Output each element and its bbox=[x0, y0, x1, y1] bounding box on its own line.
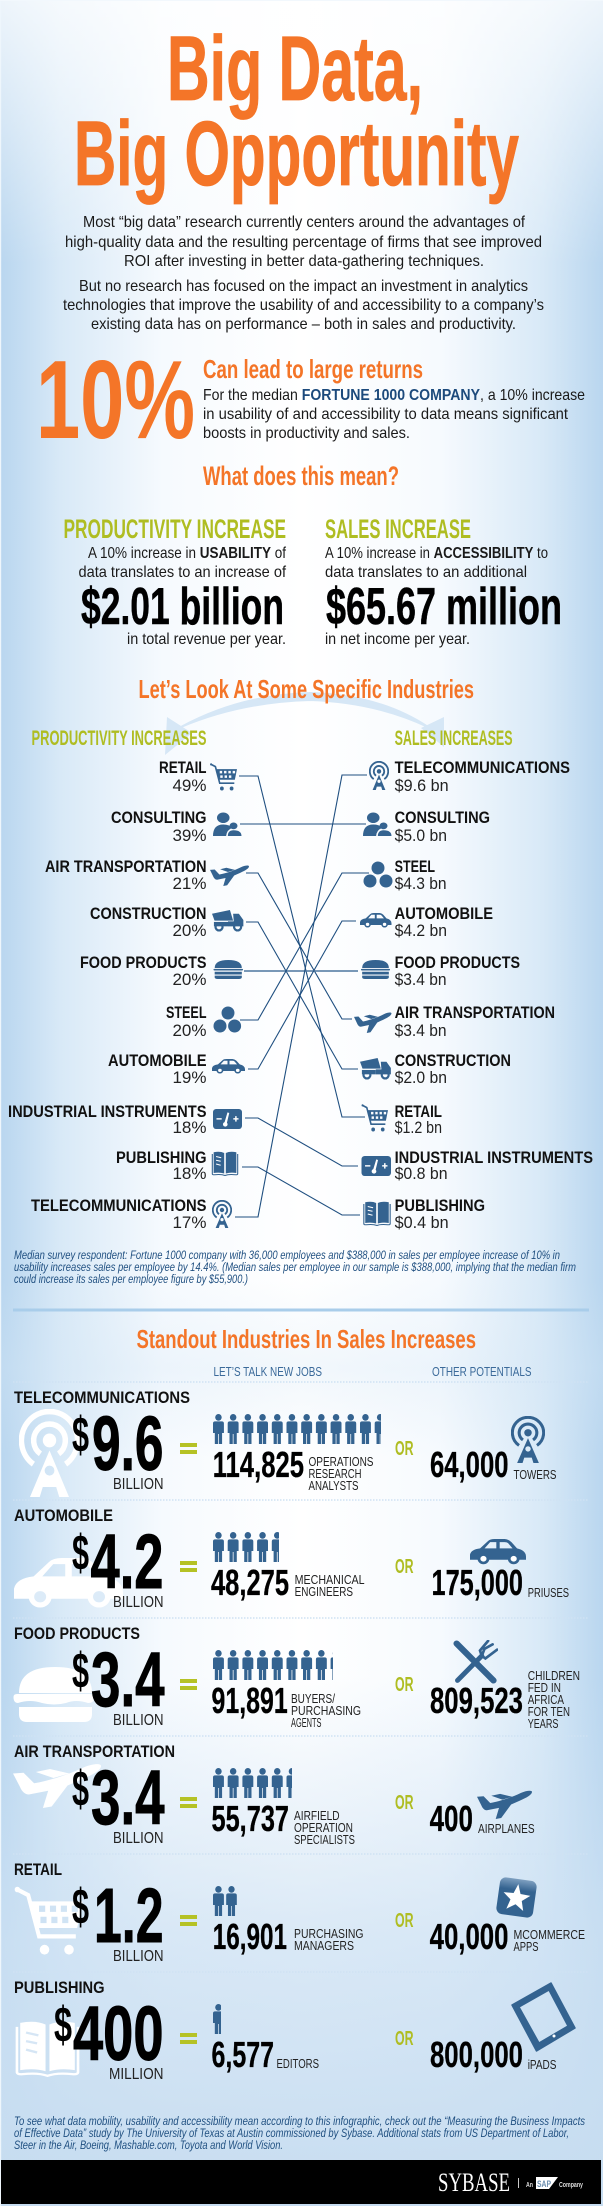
10 percent text: boosts in productivity and sales. bbox=[203, 425, 410, 442]
children fed figure: FOR TEN bbox=[528, 1704, 570, 1719]
jobs figure: EDITORS bbox=[276, 2056, 319, 2071]
air transportation sales: $3.4 bn bbox=[395, 1021, 447, 1040]
consulting sales: $5.0 bn bbox=[395, 826, 447, 845]
air transportation sales bbox=[354, 1003, 555, 1040]
consulting productivity: 39% bbox=[172, 826, 206, 845]
dollar amount: 1.2 bbox=[94, 1873, 164, 1959]
air transportation productivity: 21% bbox=[172, 874, 206, 893]
food products productivity bbox=[80, 953, 243, 989]
automobile productivity: AUTOMOBILE bbox=[108, 1051, 206, 1070]
construction sales: CONSTRUCTION bbox=[395, 1051, 511, 1070]
industrial instruments productivity: INDUSTRIAL INSTRUMENTS bbox=[8, 1102, 206, 1121]
intro paragraph 1: ROI after investing in better data-gathering techniques. bbox=[124, 253, 484, 270]
panel: sales increase: A 10% increase in ACCESSIBILITY to bbox=[325, 545, 548, 562]
dollar amount: $ bbox=[72, 1761, 89, 1817]
column header: new jobs: LET’S TALK NEW JOBS bbox=[214, 1365, 322, 1379]
intro paragraph 1 bbox=[65, 214, 542, 270]
automobile sales: $4.2 bn bbox=[395, 921, 447, 940]
jobs figure: PURCHASING bbox=[291, 1703, 361, 1718]
automobile sales: AUTOMOBILE bbox=[395, 904, 493, 923]
dollar amount: BILLION bbox=[113, 1830, 164, 1847]
publishing productivity bbox=[116, 1148, 238, 1183]
intro paragraph 2 bbox=[63, 278, 544, 333]
people pictogram bbox=[213, 1768, 292, 1798]
air transportation sales: AIR TRANSPORTATION bbox=[395, 1003, 555, 1022]
jobs figure: BUYERS/ bbox=[291, 1691, 335, 1706]
title bbox=[74, 18, 519, 205]
footer sources note bbox=[14, 2116, 585, 2152]
dollar amount: MILLION bbox=[109, 2066, 164, 2083]
jobs figure: MANAGERS bbox=[294, 1938, 354, 1953]
icon: background burger bbox=[14, 1667, 94, 1722]
intro paragraph 1: high-quality data and the resulting percentage of firms that see improved bbox=[65, 234, 542, 251]
footer bar bbox=[1, 2160, 601, 2204]
publishing sales: PUBLISHING bbox=[395, 1196, 485, 1215]
panel: sales increase bbox=[325, 514, 562, 648]
icon: background antenna bbox=[21, 1412, 78, 1497]
jobs figure: AGENTS bbox=[291, 1715, 322, 1730]
heading: standout industries: Standout Industries In Sales Increases bbox=[136, 1324, 476, 1354]
food products productivity: FOOD PRODUCTS bbox=[80, 953, 206, 972]
consulting sales: CONSULTING bbox=[395, 808, 490, 827]
children fed figure: CHILDREN bbox=[528, 1668, 580, 1683]
or label: OR bbox=[395, 2028, 414, 2050]
intro paragraph 1: Most “big data” research currently centers around the advantages of bbox=[83, 214, 526, 231]
towers figure: TOWERS bbox=[514, 1467, 557, 1482]
people pictogram bbox=[213, 1886, 237, 1916]
automobile productivity: 19% bbox=[172, 1068, 206, 1087]
construction productivity: CONSTRUCTION bbox=[90, 904, 206, 923]
dollar amount: BILLION bbox=[113, 1476, 164, 1493]
footnote: median survey respondent bbox=[14, 1250, 576, 1286]
intro paragraph 2: But no research has focused on the impact an investment in analytics bbox=[79, 278, 528, 295]
telecommunications sales bbox=[370, 758, 570, 795]
or label: OR bbox=[395, 1438, 414, 1460]
icon: tablet bbox=[512, 1983, 575, 2051]
children fed figure bbox=[430, 1668, 580, 1731]
dollar amount: $ bbox=[72, 1879, 89, 1935]
or label: OR bbox=[395, 1674, 414, 1696]
arrows: curved swap arrows bbox=[165, 693, 444, 755]
consulting productivity: CONSULTING bbox=[111, 808, 206, 827]
or label: OR bbox=[395, 1910, 414, 1932]
jobs figure: RESEARCH bbox=[308, 1466, 362, 1481]
logo: Sybase: SYBASE bbox=[438, 2168, 510, 2197]
icon: car bbox=[470, 1539, 526, 1563]
towers figure: 64,000 bbox=[430, 1444, 508, 1485]
people pictogram bbox=[213, 1532, 279, 1562]
equals sign bbox=[180, 1797, 197, 1808]
jobs figure: PURCHASING bbox=[294, 1926, 364, 1941]
10 percent text bbox=[203, 387, 585, 442]
logo: An SAP Company bbox=[526, 2177, 583, 2189]
logo: An SAP Company: SAP bbox=[537, 2179, 551, 2189]
food products sales: $3.4 bn bbox=[395, 970, 447, 989]
people pictogram bbox=[213, 2004, 221, 2034]
jobs figure: OPERATIONS bbox=[308, 1454, 374, 1469]
industrial instruments sales bbox=[362, 1148, 593, 1183]
jobs figure: ENGINEERS bbox=[295, 1584, 353, 1599]
logo: An SAP Company: An bbox=[526, 2182, 533, 2189]
10 percent text: For the median FORTUNE 1000 COMPANY, a 10% increase bbox=[203, 387, 585, 404]
dollar amount: 400 bbox=[73, 1991, 164, 2077]
industrial instruments productivity bbox=[8, 1102, 242, 1137]
what does this mean heading: What does this mean? bbox=[203, 461, 399, 491]
jobs figure: ANALYSTS bbox=[308, 1478, 359, 1493]
jobs figure: 55,737 bbox=[212, 1798, 289, 1839]
dollar amount bbox=[72, 1401, 164, 1493]
priuses figure: PRIUSES bbox=[528, 1585, 569, 1600]
telecommunications productivity: 17% bbox=[172, 1213, 206, 1232]
jobs figure bbox=[212, 1798, 355, 1847]
heading: productivity increases: PRODUCTIVITY INCREASES bbox=[32, 727, 206, 750]
panel: telecommunications row bbox=[14, 1388, 557, 1497]
people pictogram bbox=[213, 1414, 381, 1444]
logo: An SAP Company: Company bbox=[559, 2182, 583, 2189]
telecommunications sales: $9.6 bn bbox=[395, 776, 449, 795]
equals sign bbox=[180, 2033, 197, 2044]
steel productivity bbox=[166, 1003, 241, 1040]
dollar amount: BILLION bbox=[113, 1594, 164, 1611]
jobs figure: 114,825 bbox=[213, 1444, 304, 1485]
equals sign bbox=[180, 1561, 197, 1572]
construction productivity: 20% bbox=[172, 921, 206, 940]
consulting sales bbox=[363, 808, 490, 845]
panel: productivity increase: data translates to an increase of bbox=[78, 564, 286, 581]
panel: sales increase: SALES INCREASE bbox=[325, 514, 471, 544]
automobile productivity bbox=[108, 1051, 245, 1087]
air transportation productivity: AIR TRANSPORTATION bbox=[45, 857, 206, 876]
icon: background cart bbox=[15, 1887, 83, 1955]
title: Big Data, bbox=[167, 18, 423, 120]
airplanes figure bbox=[430, 1798, 535, 1839]
ipads figure: 800,000 bbox=[430, 2034, 523, 2075]
panel: publishing row bbox=[14, 1978, 575, 2083]
jobs figure: 48,275 bbox=[211, 1562, 289, 1603]
right column: sales industry rankings bbox=[354, 758, 593, 1232]
retail productivity bbox=[159, 758, 237, 795]
panel: food products row bbox=[14, 1624, 580, 1731]
column header: other potentials: OTHER POTENTIALS bbox=[432, 1365, 532, 1379]
dollar amount bbox=[72, 1519, 164, 1611]
publishing sales: $0.4 bn bbox=[395, 1213, 449, 1232]
children fed figure: YEARS bbox=[528, 1716, 559, 1731]
consulting productivity bbox=[111, 808, 242, 845]
panel: automobile row bbox=[14, 1506, 569, 1611]
10 percent figure: 10% bbox=[36, 338, 195, 462]
footnote: median survey respondent: could increase its sales per employee figure by $55,900.) bbox=[14, 1274, 248, 1286]
panel: air transportation row bbox=[13, 1742, 535, 1847]
heading: sales increases: SALES INCREASES bbox=[395, 727, 513, 750]
jobs figure: AIRFIELD bbox=[294, 1808, 340, 1823]
telecommunications sales: TELECOMMUNICATIONS bbox=[395, 758, 570, 777]
icon: fork and knife bbox=[457, 1641, 497, 1680]
jobs figure bbox=[212, 1680, 361, 1730]
ipads figure: iPADS bbox=[528, 2057, 557, 2072]
apps figure: MCOMMERCE bbox=[514, 1927, 585, 1942]
10 percent text: in usability of and accessibility to data means significant bbox=[203, 406, 569, 423]
construction productivity bbox=[90, 904, 243, 940]
panel: retail row bbox=[14, 1860, 585, 1965]
dollar amount: $ bbox=[54, 1997, 72, 2053]
icon: mcommerce app bbox=[496, 1877, 537, 1918]
jobs figure: OPERATION bbox=[294, 1820, 353, 1835]
retail productivity: RETAIL bbox=[159, 758, 206, 777]
apps figure: 40,000 bbox=[430, 1916, 508, 1957]
panel: productivity increase bbox=[64, 514, 286, 648]
row title: TELECOMMUNICATIONS bbox=[14, 1388, 190, 1407]
jobs figure: 91,891 bbox=[212, 1680, 288, 1721]
industrial instruments sales: $0.8 bn bbox=[395, 1164, 448, 1183]
dollar amount: 4.2 bbox=[90, 1519, 164, 1605]
icon: background plane bbox=[13, 1764, 101, 1808]
row title: PUBLISHING bbox=[14, 1978, 105, 1997]
panel: sales increase: in net income per year. bbox=[325, 631, 470, 648]
row title: AUTOMOBILE bbox=[14, 1506, 113, 1525]
row title: FOOD PRODUCTS bbox=[14, 1624, 140, 1643]
dollar amount: 3.4 bbox=[91, 1637, 165, 1723]
dollar amount bbox=[54, 1991, 164, 2083]
dollar amount: 9.6 bbox=[92, 1401, 164, 1487]
food products productivity: 20% bbox=[172, 970, 206, 989]
construction sales: $2.0 bn bbox=[395, 1068, 447, 1087]
children fed figure: FED IN bbox=[528, 1680, 561, 1695]
equals sign bbox=[180, 1915, 197, 1926]
steel sales: $4.3 bn bbox=[395, 874, 447, 893]
dollar amount: BILLION bbox=[113, 1712, 164, 1729]
people pictogram bbox=[213, 1650, 333, 1680]
food products sales bbox=[361, 953, 520, 989]
retail sales: RETAIL bbox=[395, 1102, 442, 1121]
telecommunications productivity: TELECOMMUNICATIONS bbox=[31, 1196, 206, 1215]
panel: productivity increase: PRODUCTIVITY INCREASE bbox=[64, 514, 286, 544]
publishing sales bbox=[364, 1196, 485, 1232]
dollar amount bbox=[72, 1637, 165, 1729]
retail sales: $1.2 bn bbox=[395, 1118, 442, 1137]
dollar amount: BILLION bbox=[113, 1948, 164, 1965]
steel productivity: 20% bbox=[172, 1021, 206, 1040]
icon: airplane bbox=[477, 1791, 532, 1819]
dollar amount: $ bbox=[72, 1407, 89, 1463]
jobs figure: 16,901 bbox=[213, 1916, 287, 1957]
air transportation productivity bbox=[45, 857, 249, 893]
construction sales bbox=[360, 1051, 511, 1087]
children fed figure: AFRICA bbox=[528, 1692, 564, 1707]
footer sources note: Steer in the Air, Boeing, Mashable.com, Toyota and World Vision. bbox=[14, 2140, 283, 2152]
icon: tower bbox=[512, 1417, 544, 1463]
steel sales: STEEL bbox=[395, 857, 435, 876]
equals sign bbox=[180, 1443, 197, 1454]
slope chart connecting lines bbox=[235, 775, 369, 1217]
food products sales: FOOD PRODUCTS bbox=[395, 953, 520, 972]
row title: RETAIL bbox=[14, 1860, 62, 1879]
publishing productivity: PUBLISHING bbox=[116, 1148, 206, 1167]
dollar amount: 3.4 bbox=[91, 1755, 165, 1841]
steel sales bbox=[364, 857, 447, 893]
panel: productivity increase: A 10% increase in USABILITY of bbox=[88, 545, 286, 562]
panel: sales increase: data translates to an additional bbox=[325, 564, 527, 581]
or label: OR bbox=[395, 1792, 414, 1814]
airplanes figure: 400 bbox=[430, 1798, 473, 1839]
intro paragraph 2: technologies that improve the usability of and accessibility to a company’s bbox=[63, 297, 544, 314]
airplanes figure: AIRPLANES bbox=[478, 1821, 535, 1836]
dollar amount bbox=[72, 1873, 164, 1965]
jobs figure: 6,577 bbox=[212, 2034, 274, 2075]
dollar amount: $ bbox=[72, 1643, 89, 1699]
jobs figure bbox=[213, 1444, 374, 1493]
10 percent heading: Can lead to large returns bbox=[203, 354, 423, 384]
panel: productivity increase: $2.01 billion bbox=[81, 578, 284, 636]
dollar amount: $ bbox=[72, 1525, 89, 1581]
icon: background book bbox=[17, 2022, 78, 2076]
jobs figure: MECHANICAL bbox=[295, 1572, 365, 1587]
telecommunications productivity bbox=[31, 1196, 231, 1232]
left column: productivity industry rankings bbox=[8, 758, 249, 1232]
retail sales bbox=[362, 1102, 442, 1137]
panel: productivity increase: in total revenue per year. bbox=[127, 631, 286, 648]
row title: AIR TRANSPORTATION bbox=[14, 1742, 175, 1761]
priuses figure: 175,000 bbox=[432, 1562, 523, 1603]
icon: background car bbox=[14, 1558, 123, 1605]
dollar amount bbox=[72, 1755, 165, 1847]
publishing productivity: 18% bbox=[172, 1164, 206, 1183]
steel productivity: STEEL bbox=[166, 1003, 206, 1022]
intro paragraph 2: existing data has on performance – both in sales and productivity. bbox=[91, 316, 516, 333]
industrial instruments productivity: 18% bbox=[172, 1118, 206, 1137]
jobs figure: SPECIALISTS bbox=[294, 1832, 355, 1847]
automobile sales bbox=[360, 904, 493, 940]
or label: OR bbox=[395, 1556, 414, 1578]
children fed figure: 809,523 bbox=[430, 1680, 523, 1721]
equals sign bbox=[180, 1679, 197, 1690]
retail productivity: 49% bbox=[172, 776, 206, 795]
apps figure: APPS bbox=[514, 1939, 539, 1954]
